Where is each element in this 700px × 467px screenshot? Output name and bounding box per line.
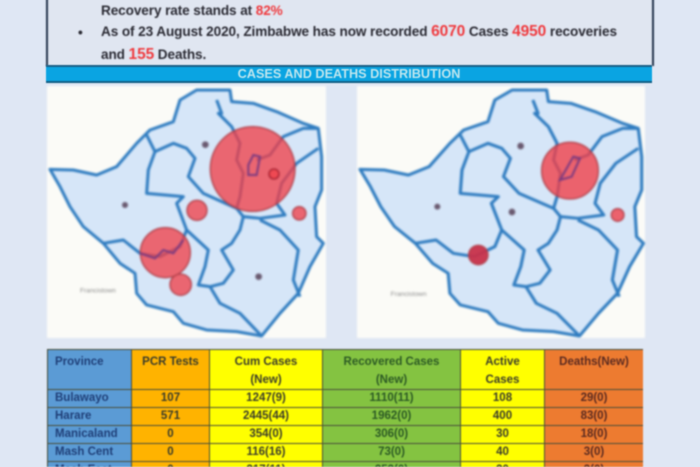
table: province statistics: 29(0) [581,392,607,404]
panel: deaths map: Francistown [391,291,427,298]
table: province statistics: Manicaland [55,428,118,440]
table: province statistics: 3(0) [584,446,604,458]
panel: cases map: Francistown [80,288,116,295]
text: deaths: and 155 Deaths. [101,46,206,63]
maps [46,86,646,339]
panel: summary text [46,0,654,66]
table: province statistics: 1247(9) [246,392,286,404]
table: province statistics: 107 [161,392,180,404]
table: province statistics: 73(0) [378,446,405,458]
panel: deaths map [357,86,645,338]
bullet: • [78,25,83,40]
table: province statistics: Province [55,356,104,368]
table: province statistics: Cases [486,374,519,386]
text: recovery rate: Recovery rate stands at 82% [101,3,283,18]
table: province statistics: 0 [167,446,174,458]
table: province statistics: (New) [250,374,282,386]
table: province statistics: Recovered Cases [344,356,439,368]
table: province statistics: 83(0) [581,410,607,422]
table: province statistics: Harare [55,410,91,422]
table: province statistics: 18(0) [581,428,607,440]
table: province statistics: 354(0) [249,428,283,440]
table: province statistics: 2445(44) [243,410,289,422]
table: province statistics: (New) [376,374,407,386]
table: province statistics: Deaths(New) [559,356,629,368]
table: province statistics: Cum Cases [235,356,297,368]
table: province statistics: PCR Tests [142,356,199,368]
table: province statistics [46,348,644,467]
table: province statistics: 1110(11) [369,392,414,404]
table: province statistics: 400 [493,410,512,422]
table: province statistics: 40 [496,446,509,458]
text: totals: As of 23 August 2020, Zimbabwe has now recorded 6070 Cases 4950 recoveries [101,23,617,40]
table: province statistics: 116(16) [246,446,286,458]
panel: cases map [47,86,326,338]
table: province statistics: 571 [161,410,180,422]
table: province statistics: 306(0) [375,428,408,440]
table: province statistics: 0 [167,428,174,440]
table: province statistics: Mash Cent [55,446,113,458]
table: province statistics: Active [485,356,520,368]
table: province statistics: 1962(0) [372,410,411,422]
table: province statistics: Bulawayo [55,392,109,404]
table: province statistics: 108 [493,392,512,404]
heading: cases and deaths distribution [46,65,652,83]
table: province statistics: 30 [496,428,509,440]
heading: cases and deaths distribution: CASES AND DEATHS DISTRIBUTION [238,67,460,81]
